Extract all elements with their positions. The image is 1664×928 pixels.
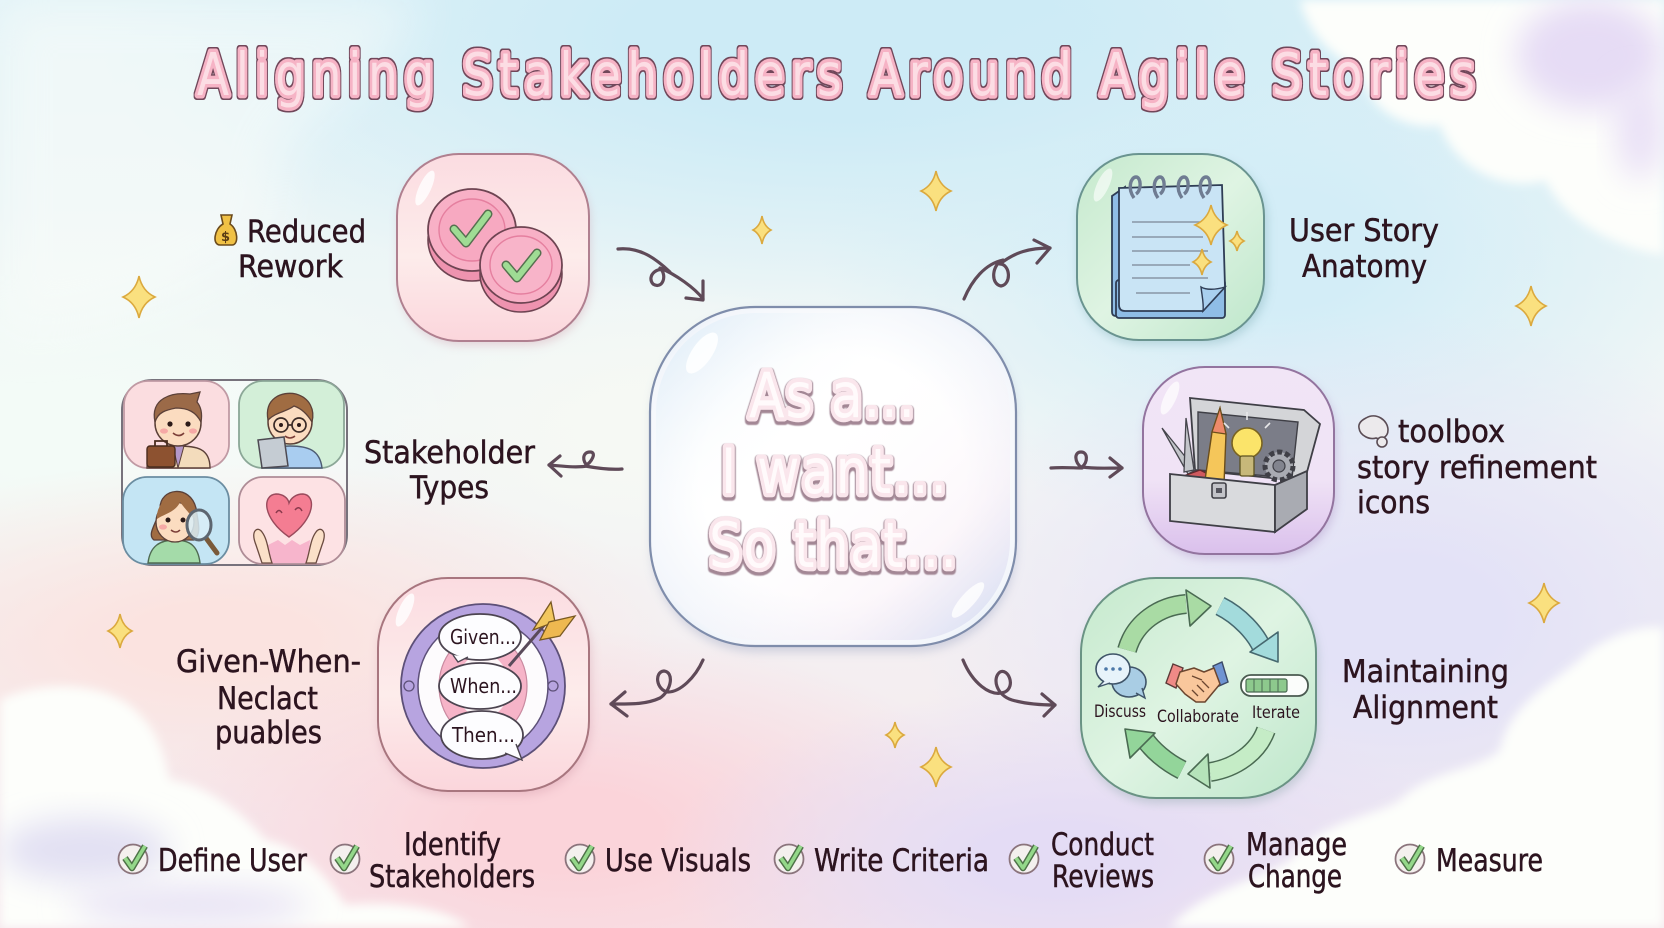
checklist row: [118, 827, 1543, 895]
item: conduct reviews: Reviews: [1052, 859, 1154, 895]
item: manage change: Manage: [1246, 827, 1347, 863]
icon: cycle arrows: [1125, 590, 1278, 788]
label: given when then: [176, 644, 361, 751]
item: manage change: [1204, 827, 1347, 895]
label: maintaining alignment: [1342, 654, 1509, 726]
cell: business stakeholder: [124, 381, 229, 468]
panel: reduced rework: [397, 154, 590, 345]
icon: money bag: $: [221, 230, 230, 245]
item: conduct reviews: [1010, 827, 1154, 895]
speech bubble: then: Then...: [451, 723, 515, 747]
icon: handshake: [1166, 662, 1228, 702]
icon: discuss bubbles: [1096, 654, 1146, 698]
icon: toolbox with tools: [1162, 398, 1320, 532]
icon: target: [401, 604, 565, 768]
label: user story anatomy: Anatomy: [1302, 249, 1427, 285]
label: reduced rework: [215, 214, 366, 285]
arrow: rework to bubble: [618, 249, 703, 300]
cell: analyst with tablet: [239, 381, 344, 468]
item: measure: [1396, 843, 1543, 879]
label: toolbox: icons: [1357, 485, 1430, 521]
speech bubble: when: When...: [450, 674, 517, 698]
item: write criteria: Write Criteria: [814, 843, 989, 879]
arrow: bubble to user story: [964, 240, 1050, 299]
panel: maintaining alignment: [1081, 578, 1318, 803]
pencil: [1205, 408, 1226, 484]
item: measure: Measure: [1436, 843, 1543, 879]
panel: given when then: [378, 578, 591, 795]
cell: researcher with magnifier: [123, 477, 229, 564]
speech bubble: when: [439, 663, 521, 709]
scissors: [1162, 428, 1196, 474]
story line: so that: So that...: [709, 509, 957, 582]
speech bubble: given: Given...: [450, 625, 516, 649]
label: toolbox: [1357, 414, 1597, 521]
box body: [1170, 474, 1275, 532]
label: discuss: Discuss: [1094, 702, 1146, 722]
label: given when then: Given-When-: [176, 644, 361, 680]
item: identify stakeholders: Stakeholders: [369, 859, 535, 895]
label: stakeholder types: Stakeholder: [364, 435, 535, 471]
label: reduced rework: Rework: [238, 249, 343, 285]
panel: toolbox: [1143, 367, 1336, 558]
item: conduct reviews: Conduct: [1051, 827, 1154, 863]
panel: stakeholder types: [122, 380, 347, 565]
label: stakeholder types: Types: [409, 470, 489, 506]
icon: arrow in target: [509, 602, 575, 666]
speech bubble: given: [439, 614, 521, 662]
label: given when then: Neclact: [217, 681, 318, 717]
icon: coins with checks: [428, 189, 562, 312]
cell: customer heart: [239, 477, 345, 564]
label: stakeholder types: [364, 435, 535, 506]
speech bubble: then: [441, 711, 523, 760]
icon: progress bar: [1241, 675, 1308, 696]
label: maintaining alignment: Maintaining: [1342, 654, 1509, 690]
label: reduced rework: Reduced: [247, 214, 366, 250]
item: define user: Define User: [158, 843, 307, 879]
label: user story anatomy: User Story: [1289, 213, 1439, 249]
gear: [1265, 452, 1293, 480]
arrow: bubble to maintaining alignment: [963, 660, 1055, 716]
central bubble: story template: [650, 307, 1016, 652]
item: define user: [118, 843, 307, 879]
label: collaborate: Collaborate: [1157, 707, 1239, 727]
arrow: bubble to stakeholder types: [549, 452, 622, 476]
item: identify stakeholders: [330, 827, 535, 895]
light bulb: [1232, 428, 1262, 458]
arrow: bubble to toolbox: [1051, 452, 1122, 477]
label: maintaining alignment: Alignment: [1353, 690, 1498, 726]
icon: notebook: [1112, 177, 1244, 318]
label: user story anatomy: [1289, 213, 1439, 285]
title: Aligning Stakeholders Around Agile Stories: [197, 41, 1475, 109]
story line: i want: I want...: [721, 435, 947, 508]
panel: user story anatomy: [1077, 154, 1267, 344]
story line: as a: As a...: [749, 359, 915, 432]
arrow: bubble to given when then: [611, 660, 703, 716]
item: identify stakeholders: Identify: [404, 827, 501, 863]
label: given when then: puables: [215, 715, 322, 751]
item: manage change: Change: [1248, 859, 1342, 895]
item: use visuals: [566, 843, 751, 879]
icon: thought cloud: [1359, 416, 1388, 447]
item: use visuals: Use Visuals: [605, 843, 751, 879]
label: toolbox: story refinement: [1357, 450, 1597, 486]
label: iterate: Iterate: [1252, 703, 1300, 723]
icon: money bag: [215, 215, 237, 245]
label: toolbox: toolbox: [1398, 414, 1505, 450]
sparkles: [108, 171, 1559, 787]
